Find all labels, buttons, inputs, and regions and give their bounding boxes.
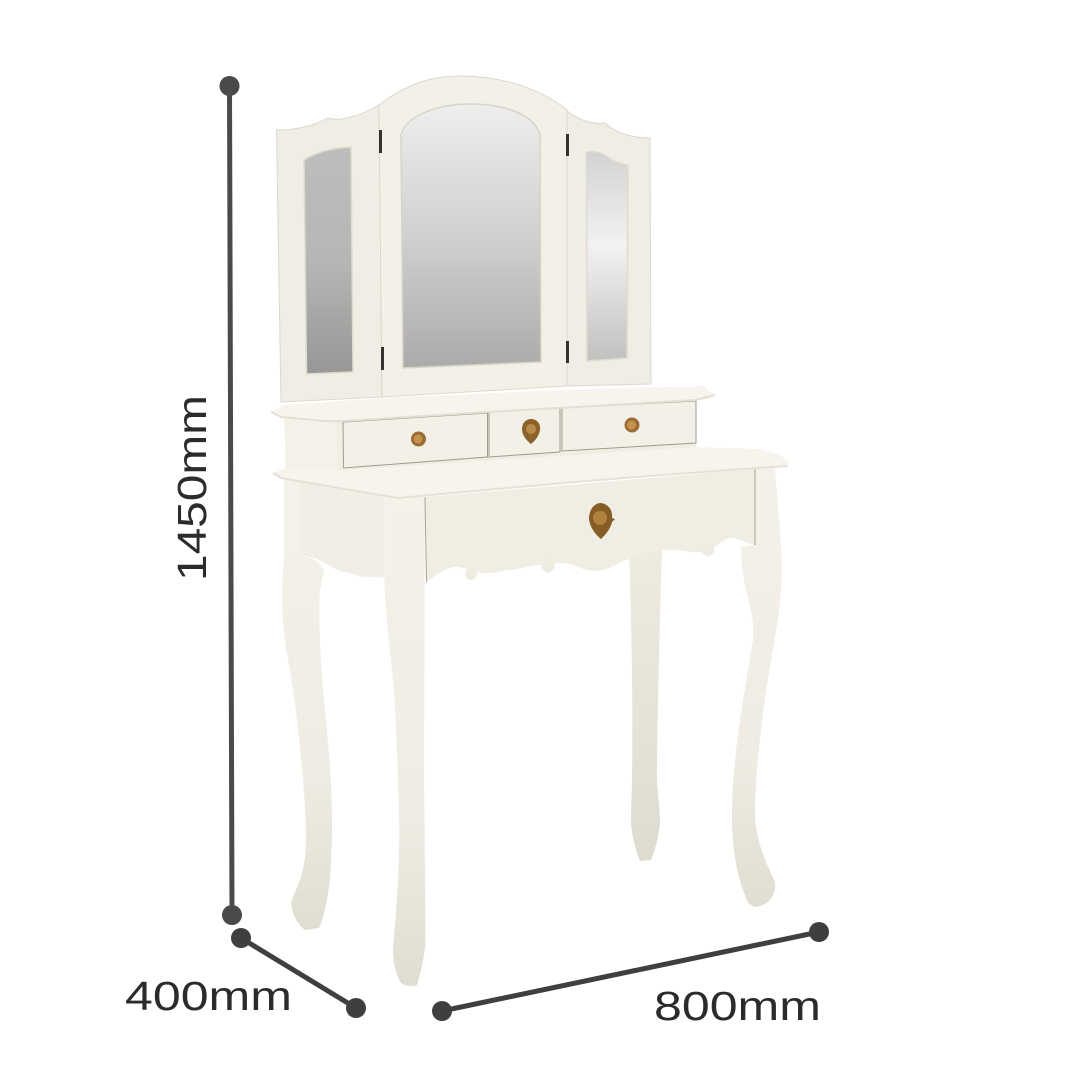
mirror right frame — [566, 110, 651, 386]
width dimension line — [432, 922, 829, 1021]
knob right — [624, 418, 640, 432]
mirror centre glass — [401, 104, 541, 368]
depth dimension line — [231, 928, 366, 1018]
carved drops — [465, 544, 714, 580]
side panel shade — [301, 483, 384, 576]
riser body — [284, 398, 696, 472]
height label: 1450mm — [169, 395, 215, 581]
riser top — [271, 386, 715, 421]
apron drawer line — [425, 469, 755, 582]
back left leg — [282, 480, 332, 930]
riser drawer middle — [489, 408, 560, 457]
width label: 800mm — [654, 983, 821, 1029]
depth label: 400mm — [125, 973, 292, 1019]
table top — [273, 447, 789, 498]
riser top front edge — [271, 395, 715, 421]
dressing table — [271, 76, 789, 986]
back right leg — [629, 545, 662, 861]
mirror centre frame — [379, 76, 567, 397]
table apron front — [426, 469, 755, 582]
mirror right glass — [586, 152, 628, 361]
lock plate middle — [522, 419, 540, 444]
table apron side — [284, 478, 398, 578]
riser drawer right — [562, 401, 696, 451]
front left leg — [384, 497, 426, 986]
front right leg — [732, 468, 782, 907]
riser side — [284, 414, 338, 472]
knob left — [411, 432, 426, 446]
mirror left frame — [276, 105, 382, 402]
hinges — [379, 130, 569, 370]
table top front edge — [273, 466, 788, 498]
height dimension line — [220, 76, 242, 925]
mirror left glass — [304, 147, 353, 374]
lock plate lower — [589, 503, 615, 539]
riser drawer left — [343, 413, 488, 468]
